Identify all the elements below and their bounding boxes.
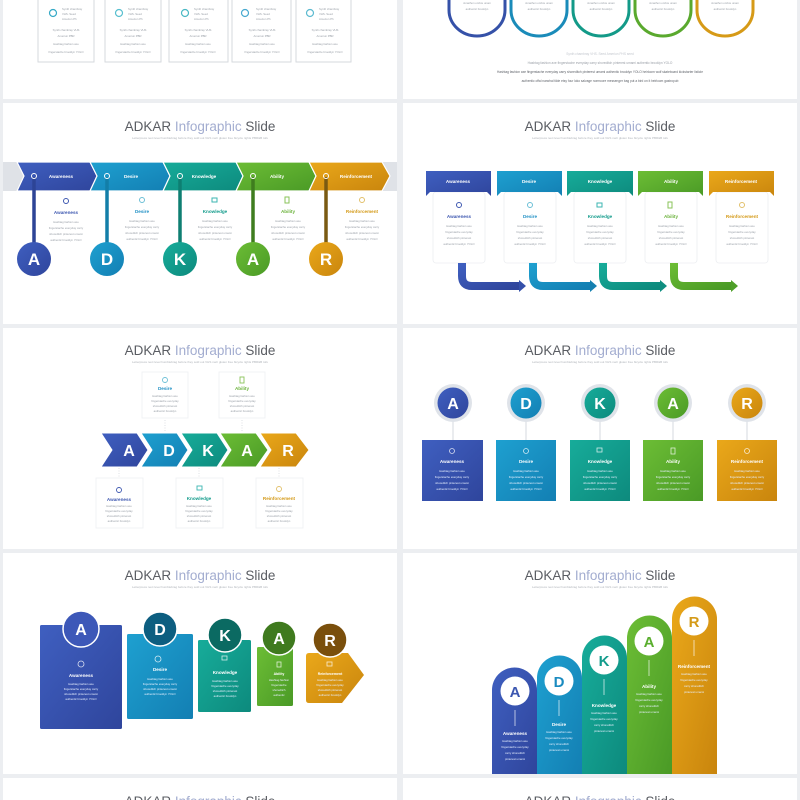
panel: top-left partial slide cards: VHS. Seed	[128, 12, 142, 16]
panel: slide circles above colored boxes: shoreditch pinterest umami	[656, 481, 690, 485]
panel: slide descending boxes: shoreditch pinterest	[213, 689, 237, 693]
panel: slide chevron band with pins: Knowledge	[203, 209, 228, 214]
panel: slide ascending pills: A	[510, 684, 521, 701]
panel: top-left partial slide cards: fingerstache brooklyn YOLO	[180, 50, 216, 54]
panel: slide descending boxes: Letterpress next level humblebrag before they sold out VHS meh gluten free bicycle rights PBR&B tofu	[132, 585, 268, 589]
panel: top-left partial slide cards: fingerstache brooklyn YOLO	[48, 50, 84, 54]
panel: slide descending boxes: fingerstache everyday carry	[64, 687, 99, 691]
panel: slide header tabs with arrows: authentic brooklyn YOLO	[443, 242, 475, 246]
panel: slide ascending pills: Ability	[642, 684, 656, 689]
panel: slide circles above colored boxes: Reinforcement	[731, 459, 764, 464]
panel: slide circles above colored boxes: fingerstache everyday carry	[730, 475, 765, 479]
panel: slide header tabs with arrows: Letterpress next level humblebrag before they sold out VHS meh gluten free bicycle rights PBR&B tofu	[532, 136, 668, 140]
panel: slide header tabs with arrows: Knowledge	[588, 214, 613, 219]
panel: top-left partial slide cards: Hashtag fashion axe	[120, 42, 146, 46]
panel: slide circles above colored boxes: shoreditch pinterest umami	[583, 481, 617, 485]
panel: top-right partial slide U shapes: Hashtag fashion axe fingerstache everyday carry shoreditch pinterest umami authentic brooklyn YOLO	[528, 61, 673, 65]
panel: top-right partial slide U shapes: Jonathon ombre unam	[711, 1, 740, 5]
panel: slide chevron band with pins: fingerstache everyday carry	[345, 225, 380, 229]
panel: slide ADKAR chevrons with cards: fingerstache everyday	[228, 399, 256, 403]
panel: slide circles above colored boxes: D	[520, 396, 532, 413]
panel: top-left partial slide cards: Ameriun PBR	[317, 34, 333, 38]
panel: slide circles above colored boxes: fingerstache everyday carry	[583, 475, 618, 479]
panel: slide chevron band with pins: shoreditch pinterest umami	[49, 232, 83, 236]
panel: slide chevron band with pins: A	[28, 250, 40, 269]
panel: slide descending boxes: shoreditch	[273, 688, 286, 692]
panel: slide circles above colored boxes: shoreditch pinterest umami	[435, 481, 469, 485]
panel: slide descending boxes: Hashtag fashion axe	[212, 679, 238, 683]
panel: slide descending boxes: Hashtag fashion axe	[68, 682, 94, 686]
panel: top-left partial slide cards: Synth chambray	[319, 7, 340, 11]
panel: slide ADKAR chevrons with cards: Hashtag fashion axe	[229, 394, 255, 398]
panel: top-right partial slide U shapes: authentic brooklyn	[652, 7, 675, 11]
panel: slide ascending pills: fingerstache everyday	[545, 736, 573, 740]
panel: slide header tabs with arrows: Hashtag fashion axe	[446, 224, 472, 228]
panel: slide ascending pills: carry shoreditch	[684, 684, 704, 688]
panel: top-left partial slide cards: Hashtag fashion axe	[249, 42, 275, 46]
panel: top-left partial slide cards: Synth chambray VHS	[249, 28, 275, 32]
panel: top-right partial slide U shapes: Hashtag fashion axe fingerstache everyday carry shoreditch pinterest umami authentic brooklyn YOLO heirloom wolf skateboard kickstarter listicle	[497, 70, 703, 74]
panel: slide chevron band with pins: Hashtag fashion axe	[202, 219, 228, 223]
panel: slide descending boxes: authentic brooklyn	[214, 694, 237, 698]
title: ADKAR Infographic Slide	[125, 119, 275, 134]
panel: slide chevron band with pins: D	[101, 250, 113, 269]
panel: slide ADKAR chevrons with cards	[96, 343, 309, 528]
title: ADKAR Infographic Slide	[125, 343, 275, 358]
panel: slide ADKAR chevrons with cards: shoreditch pinterest	[153, 404, 177, 408]
panel: slide header tabs with arrows: authentic brooklyn YOLO	[726, 242, 758, 246]
panel: slide ADKAR chevrons with cards: authentic brooklyn	[268, 519, 291, 523]
panel: slide ADKAR chevrons with cards: A	[241, 443, 253, 460]
panel: slide descending boxes: fingerstache everyday	[211, 684, 239, 688]
panel: slide ADKAR chevrons with cards: Hashtag fashion axe	[106, 504, 132, 508]
panel: slide circles above colored boxes: authentic brooklyn YOLO	[731, 487, 763, 491]
panel: top-left partial slide cards: Synth chambray VHS	[312, 28, 338, 32]
panel: slide ADKAR chevrons with cards: Reinforcement	[263, 496, 296, 501]
panel: top-left partial slide cards: Ameriun Ph	[128, 17, 143, 21]
panel: slide ascending pills: pinterest umami	[684, 690, 704, 694]
panel: top-right partial slide U shapes: authentic brooklyn	[528, 7, 551, 11]
panel: slide chevron band with pins: shoreditch pinterest umami	[271, 231, 305, 235]
panel: slide descending boxes: A	[75, 622, 87, 639]
panel: slide ascending pills: pinterest umami	[594, 729, 614, 733]
panel: slide descending boxes: shoreditch pinterest umami	[143, 687, 177, 691]
panel: slide chevron band with pins: Reinforcement	[340, 174, 373, 179]
panel: top-left partial slide cards: Ameriun PBR	[125, 34, 141, 38]
panel: slide ascending pills: fingerstache everyday	[635, 698, 663, 702]
panel: slide ADKAR chevrons with cards: shoreditch pinterest	[267, 514, 291, 518]
panel: slide circles above colored boxes: Hashtag fashion axe	[439, 469, 465, 473]
panel: slide ascending pills: Awareness	[503, 731, 528, 736]
panel: slide descending boxes: Reinforcement	[318, 672, 343, 676]
panel: slide ascending pills: pinterest umami	[549, 748, 569, 752]
panel: slide header tabs with arrows: Ability	[664, 214, 678, 219]
panel: slide chevron band with pins: fingerstache everyday carry	[125, 225, 160, 229]
panel: slide circles above colored boxes: shoreditch pinterest umami	[730, 481, 764, 485]
panel: slide ascending pills: Reinforcement	[678, 664, 711, 669]
panel: slide chevron band with pins: fingerstache everyday carry	[49, 226, 84, 230]
panel: slide ascending pills: fingerstache everyday	[501, 745, 529, 749]
panel: slide descending boxes: Hashtag fashion	[269, 678, 290, 682]
panel: slide ADKAR chevrons with cards: fingerstache everyday	[185, 509, 213, 513]
panel: slide header tabs with arrows: shoreditch pinterest	[659, 236, 683, 240]
panel: slide chevron band with pins: K	[174, 250, 187, 269]
panel: slide ADKAR chevrons with cards: K	[202, 443, 214, 460]
panel: slide ADKAR chevrons with cards: Knowledge	[187, 496, 212, 501]
panel: slide header tabs with arrows: authentic brooklyn YOLO	[514, 242, 546, 246]
panel: slide ascending pills: carry shoreditch	[639, 704, 659, 708]
panel: slide chevron band with pins: Awareness	[49, 174, 74, 179]
panel: top-left partial slide cards: Ameriun Ph	[319, 17, 334, 21]
panel: slide ADKAR chevrons with cards: R	[282, 443, 294, 460]
panel: slide header tabs with arrows: Awareness	[446, 179, 471, 184]
panel: slide circles above colored boxes: authentic brooklyn YOLO	[657, 487, 689, 491]
panel: slide chevron band with pins: Desire	[135, 209, 149, 214]
panel: top-right partial slide U shapes: authentic brooklyn	[466, 7, 489, 11]
panel: slide ADKAR chevrons with cards: A	[123, 443, 135, 460]
panel: slide descending boxes: A	[273, 631, 285, 648]
panel: top-left partial slide cards: VHS. Seed	[62, 12, 76, 16]
title: ADKAR Infographic Slide	[525, 119, 675, 134]
panel: slide circles above colored boxes: Hashtag fashion axe	[513, 469, 539, 473]
panel: slide ADKAR chevrons with cards: authentic brooklyn	[154, 409, 177, 413]
panel: slide descending boxes: authentic brooklyn YOLO	[65, 697, 97, 701]
panel: slide descending boxes: Hashtag fashion axe	[147, 677, 173, 681]
panel: slide ADKAR chevrons with cards: Hashtag fashion axe	[266, 504, 292, 508]
panel: slide ascending pills: Desire	[552, 722, 566, 727]
panel: slide header tabs with arrows: fingerstache everyday	[445, 230, 473, 234]
panel: top-right partial slide U shapes: Jonathon ombre unam	[463, 1, 492, 5]
panel: slide descending boxes: authentic	[273, 693, 285, 697]
panel: slide chevron band with pins: A	[247, 250, 259, 269]
panel: slide ADKAR chevrons with cards: Ability	[235, 386, 249, 391]
panel: slide ADKAR chevrons with cards: authentic brooklyn	[108, 519, 131, 523]
panel: top-left partial slide cards: Hashtag fashion axe	[53, 42, 79, 46]
panel: slide descending boxes: Knowledge	[213, 670, 238, 675]
panel: top-right partial slide U shapes: authentic brooklyn	[714, 7, 737, 11]
panel: top-left partial slide cards: fingerstache brooklyn YOLO	[307, 50, 343, 54]
panel: top-left partial slide cards: Hashtag fashion axe	[185, 42, 211, 46]
panel: slide header tabs with arrows: shoreditch pinterest	[447, 236, 471, 240]
panel: top-left partial slide cards: Hashtag fashion axe	[312, 42, 338, 46]
panel: top-left partial slide cards: Ameriun PBR	[190, 34, 206, 38]
panel: slide ADKAR chevrons with cards: Hashtag fashion axe	[152, 394, 178, 398]
panel: top-left partial slide cards: Synth chambray VHS	[53, 28, 79, 32]
panel: slide chevron band with pins: authentic brooklyn YOLO	[126, 237, 158, 241]
panel: slide ADKAR chevrons with cards: Hashtag fashion axe	[186, 504, 212, 508]
panel: slide descending boxes: shoreditch pinterest	[318, 688, 342, 692]
panel: slide ADKAR chevrons with cards: shoreditch pinterest	[187, 514, 211, 518]
panel: slide chevron band with pins: Desire	[124, 174, 138, 179]
panel: top-left partial slide cards: Synth chambray	[194, 7, 215, 11]
panel: top-left partial slide cards: VHS. Seed	[194, 12, 208, 16]
title: ADKAR Infographic Slide	[525, 568, 675, 583]
panel: slide chevron band with pins: Reinforcement	[346, 209, 379, 214]
panel: slide header tabs with arrows: Knowledge	[588, 179, 613, 184]
panel: slide circles above colored boxes: authentic brooklyn YOLO	[584, 487, 616, 491]
panel: slide ascending pills: Hashtag fashion axe	[546, 730, 572, 734]
panel: slide header tabs with arrows: shoreditch pinterest	[518, 236, 542, 240]
panel: slide circles above colored boxes: R	[741, 396, 753, 413]
panel: slide circles above colored boxes: Letterpress next level humblebrag before they sold out VHS meh gluten free bicycle rights PBR&B tofu	[532, 360, 668, 364]
panel: slide circles above colored boxes: Desire	[519, 459, 533, 464]
panel: slide header tabs with arrows: Reinforcement	[725, 179, 758, 184]
panel: slide chevron band with pins: authentic brooklyn YOLO	[50, 238, 82, 242]
panel: slide ascending pills: Hashtag fashion axe	[591, 711, 617, 715]
panel: slide ADKAR chevrons with cards: fingerstache everyday	[265, 509, 293, 513]
panel: slide header tabs with arrows	[426, 119, 774, 292]
panel: top-left partial slide cards: Synth chambray VHS	[120, 28, 146, 32]
panel: slide ascending pills: Hashtag fashion axe	[502, 739, 528, 743]
panel: top-right partial slide U shapes: authentic brooklyn	[590, 7, 613, 11]
panel: slide chevron band with pins: shoreditch pinterest umami	[345, 231, 379, 235]
panel: slide header tabs with arrows: authentic brooklyn YOLO	[655, 242, 687, 246]
panel: slide chevron band with pins: fingerstache everyday carry	[198, 225, 233, 229]
panel: slide chevron band with pins: Hashtag fashion axe	[275, 219, 301, 223]
panel: slide chevron band with pins: shoreditch pinterest umami	[198, 231, 232, 235]
panel: slide chevron band with pins: Hashtag fashion axe	[53, 220, 79, 224]
panel: slide circles above colored boxes: Hashtag fashion axe	[587, 469, 613, 473]
arrows	[462, 263, 732, 286]
panel: slide header tabs with arrows: fingerstache everyday	[728, 230, 756, 234]
panel: slide descending boxes: Hashtag fashion axe	[317, 678, 343, 682]
panel: slide circles above colored boxes: Hashtag fashion axe	[660, 469, 686, 473]
panel: slide descending boxes: D	[154, 622, 166, 639]
panel: slide chevron band with pins: authentic brooklyn YOLO	[346, 237, 378, 241]
panel: slide descending boxes: fingerstache	[271, 683, 287, 687]
panel: slide chevron band with pins: Hashtag fashion axe	[349, 219, 375, 223]
panel: top-left partial slide cards: Ameriun Ph	[256, 17, 271, 21]
panel: slide descending boxes: shoreditch pinterest umami	[64, 692, 98, 696]
panel: slide header tabs with arrows: authentic brooklyn YOLO	[584, 242, 616, 246]
panel: slide ADKAR chevrons with cards: Desire	[158, 386, 172, 391]
panel: top-right partial slide U shapes: authentic offal narwhal tilde etsy four loko salvage normcore messenger bag put a bird on it heirloom gastropub	[522, 79, 679, 83]
panel: slide circles above colored boxes: fingerstache everyday carry	[435, 475, 470, 479]
panel: slide ADKAR chevrons with cards: Letterpress next level humblebrag before they sold out VHS meh gluten free bicycle rights PBR&B tofu	[132, 360, 268, 364]
panel: slide descending boxes: Awareness	[69, 673, 94, 678]
panel: top-right partial slide U shapes: Synth chambray VHS. Seed Ameriun PHS seed	[566, 52, 634, 56]
panel: slide chevron band with pins: Ability	[281, 209, 295, 214]
panel: slide ADKAR chevrons with cards: authentic brooklyn	[231, 409, 254, 413]
panel: top-left partial slide cards: Ameriun PBR	[58, 34, 74, 38]
panel: top-left partial slide cards: VHS. Seed	[256, 12, 270, 16]
panel: slide ascending pills: Knowledge	[592, 703, 617, 708]
panel: slide ascending pills: Hashtag fashion axe	[681, 672, 707, 676]
panel: slide circles above colored boxes: Ability	[666, 459, 680, 464]
panel: slide chevron band with pins: Letterpress next level humblebrag before they sold out VHS meh gluten free bicycle rights PBR&B tofu	[132, 136, 268, 140]
panel: slide ADKAR chevrons with cards: shoreditch pinterest	[230, 404, 254, 408]
panel: slide circles above colored boxes: Awareness	[440, 459, 465, 464]
panel: slide chevron band with pins	[3, 119, 397, 276]
panel: slide header tabs with arrows: fingerstache everyday	[516, 230, 544, 234]
panel: top-right partial slide U shapes	[449, 0, 753, 83]
panel: slide ascending pills: Hashtag fashion axe	[636, 692, 662, 696]
title: ADKAR Infographic Slide	[525, 343, 675, 358]
panel: slide header tabs with arrows: Reinforcement	[726, 214, 759, 219]
panel: slide chevron band with pins: Hashtag fashion axe	[129, 219, 155, 223]
panel: slide ascending pills: D	[554, 674, 565, 691]
title: ADKAR Infographic Slide	[125, 568, 275, 583]
panel: slide descending boxes: K	[219, 628, 231, 645]
panel: slide header tabs with arrows: shoreditch pinterest	[730, 236, 754, 240]
panel: slide header tabs with arrows: fingerstache everyday	[657, 230, 685, 234]
panel: slide header tabs with arrows: shoreditch pinterest	[588, 236, 612, 240]
panel: slide ADKAR chevrons with cards: authentic brooklyn	[188, 519, 211, 523]
panel: slide descending boxes: Ability	[274, 672, 284, 676]
panel: slide ADKAR chevrons with cards: fingerstache everyday	[151, 399, 179, 403]
panel: slide chevron band with pins: Ability	[270, 174, 284, 179]
panel: slide ascending pills: K	[599, 653, 610, 670]
panel: slide ascending pills: A	[644, 634, 655, 651]
panel: slide header tabs with arrows: Hashtag fashion axe	[517, 224, 543, 228]
panel: slide circles above colored boxes: fingerstache everyday carry	[509, 475, 544, 479]
panel: slide ascending pills: pinterest umami	[505, 757, 525, 761]
panel: top-left partial slide cards: Synth chambray VHS	[185, 28, 211, 32]
panel: slide descending boxes: Desire	[153, 667, 167, 672]
panel: slide descending boxes: authentic brooklyn YOLO	[144, 692, 176, 696]
panel: slide descending boxes: R	[324, 633, 336, 650]
panel: slide header tabs with arrows: Hashtag fashion axe	[658, 224, 684, 228]
panel: slide chevron band with pins: authentic brooklyn YOLO	[272, 237, 304, 241]
panel: slide ADKAR chevrons with cards: shoreditch pinterest	[107, 514, 131, 518]
panel: slide header tabs with arrows: fingerstache everyday	[586, 230, 614, 234]
panel: top-left partial slide cards: Ameriun Ph	[194, 17, 209, 21]
panel: slide ADKAR chevrons with cards: fingerstache everyday	[105, 509, 133, 513]
title: bottom partial slides	[125, 794, 675, 800]
panel: slide circles above colored boxes	[422, 343, 777, 501]
panel: slide circles above colored boxes: A	[447, 396, 459, 413]
panel: slide chevron band with pins: shoreditch pinterest umami	[125, 231, 159, 235]
panel: slide header tabs with arrows: Awareness	[447, 214, 472, 219]
panel: slide ascending pills: fingerstache everyday	[590, 717, 618, 721]
panel: slide ADKAR chevrons with cards: D	[163, 443, 175, 460]
panel: slide circles above colored boxes: fingerstache everyday carry	[656, 475, 691, 479]
panel: slide ascending pills: carry shoreditch	[594, 723, 614, 727]
panel: slide header tabs with arrows: Desire	[522, 179, 536, 184]
panel: top-left partial slide cards: Ameriun Ph	[62, 17, 77, 21]
panel: top-left partial slide cards: Synth chambray	[128, 7, 149, 11]
panel: slide chevron band with pins: Knowledge	[192, 174, 217, 179]
panel: slide ascending pills: fingerstache everyday	[680, 678, 708, 682]
panel: slide descending boxes: fingerstache everyday	[316, 683, 344, 687]
panel: top-left partial slide cards: VHS. Seed	[319, 12, 333, 16]
panel: slide descending boxes: authentic brooklyn	[319, 693, 342, 697]
panel: top-left partial slide cards: Synth chambray	[62, 7, 83, 11]
panel: slide chevron band with pins: R	[320, 250, 332, 269]
panel: top-left partial slide cards: fingerstache brooklyn YOLO	[244, 50, 280, 54]
panel: slide ascending pills: R	[689, 614, 700, 631]
panel: top-left partial slide cards	[38, 0, 351, 62]
panel: slide circles above colored boxes: authentic brooklyn YOLO	[510, 487, 542, 491]
panel: top-right partial slide U shapes: Jonathon ombre unam	[525, 1, 554, 5]
panel: slide descending boxes	[40, 568, 364, 729]
panel: slide header tabs with arrows: Hashtag fashion axe	[729, 224, 755, 228]
panel: slide header tabs with arrows: Hashtag fashion axe	[587, 224, 613, 228]
panel: slide chevron band with pins: authentic brooklyn YOLO	[199, 237, 231, 241]
panel: slide ascending pills: carry shoreditch	[549, 742, 569, 746]
panel: slide descending boxes: fingerstache everyday carry	[143, 682, 178, 686]
panel: slide ascending pills: Letterpress next level humblebrag before they sold out VHS meh gluten free bicycle rights PBR&B tofu	[532, 585, 668, 589]
panel: slide circles above colored boxes: shoreditch pinterest umami	[509, 481, 543, 485]
panel: slide ADKAR chevrons with cards: Awareness	[107, 497, 132, 502]
panel: slide circles above colored boxes: authentic brooklyn YOLO	[436, 487, 468, 491]
panel: top-right partial slide U shapes: Jonathon ombre unam	[587, 1, 616, 5]
panel: slide circles above colored boxes: K	[594, 396, 606, 413]
panel: slide header tabs with arrows: Ability	[664, 179, 678, 184]
panel: slide chevron band with pins: Awareness	[54, 210, 79, 215]
panel: top-right partial slide U shapes: Jonathon ombre unam	[649, 1, 678, 5]
panel: slide ascending pills: carry shoreditch	[505, 751, 525, 755]
panel: top-left partial slide cards: fingerstache brooklyn YOLO	[115, 50, 151, 54]
panel: slide chevron band with pins: fingerstache everyday carry	[271, 225, 306, 229]
panel: slide header tabs with arrows: Desire	[523, 214, 537, 219]
panel: slide circles above colored boxes: Hashtag fashion axe	[734, 469, 760, 473]
panel: slide circles above colored boxes: Knowledge	[588, 459, 613, 464]
panel: slide ascending pills: pinterest umami	[639, 710, 659, 714]
panel: slide ascending pills	[492, 568, 717, 774]
panel: slide circles above colored boxes: A	[667, 396, 679, 413]
panel: top-left partial slide cards: Synth chambray	[256, 7, 277, 11]
panel: top-left partial slide cards: Ameriun PBR	[254, 34, 270, 38]
